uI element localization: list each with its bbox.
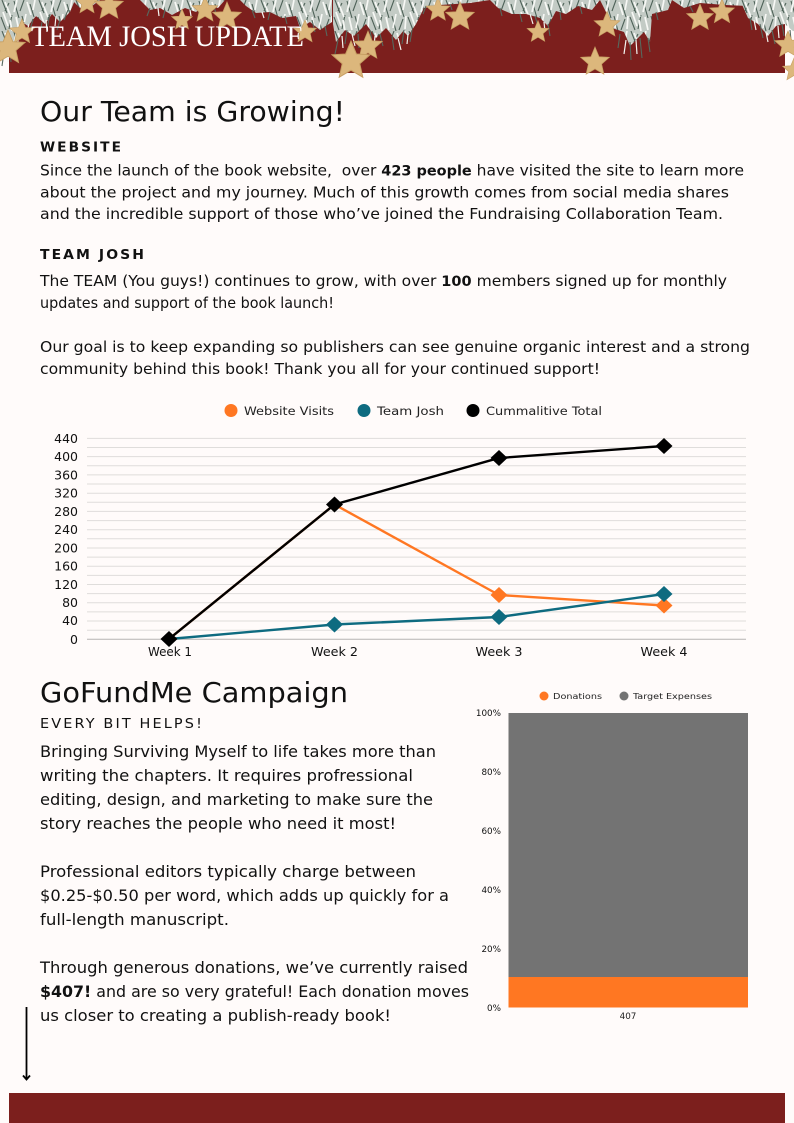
text block: website: Since the launch of the book website, over 423 people have visited the site to learn more — [40, 162, 744, 180]
x axis labels: Week 1 — [148, 644, 192, 659]
text block: team josh: updates and support of the book launch! — [40, 294, 334, 312]
bar label: 407 — [620, 1012, 636, 1022]
subheading: team josh: TEAM JOSH — [40, 247, 146, 263]
x axis labels: Week 2 — [311, 644, 358, 659]
text block: gofundme: us closer to creating a publish-ready book! — [40, 1006, 391, 1025]
bar chart axis labels: 80% — [481, 768, 501, 778]
y axis labels: 320 — [54, 486, 78, 500]
header band — [9, 0, 785, 73]
arrow — [23, 1007, 30, 1080]
legend: bar chart: Target Expenses — [632, 692, 712, 701]
legend: bar chart: Donations — [553, 692, 602, 701]
y axis labels: 160 — [54, 558, 78, 574]
text block: website: about the project and my journey. Much of this growth comes from social media shares — [40, 184, 729, 202]
fir needle fringes — [2, 4, 791, 66]
text block: gofundme: $407! and are so very grateful! Each donation moves — [40, 982, 469, 1001]
text block: team josh: Our goal is to keep expanding so publishers can see genuine organic interest and a strong — [40, 338, 750, 356]
series: cumulative total — [160, 438, 672, 647]
series: website visits — [169, 504, 672, 639]
y axis labels: 0 — [70, 632, 78, 647]
x axis labels — [148, 644, 688, 659]
y axis labels: 400 — [54, 449, 78, 464]
text block: gofundme: writing the chapters. It requires profressional — [40, 766, 413, 785]
series: team josh — [169, 586, 672, 639]
x axis labels: Week 4 — [640, 644, 688, 659]
text block: gofundme: Through generous donations, we’ve currently raised — [39, 958, 468, 977]
title: TEAM JOSH UPDATE — [31, 20, 304, 53]
text block: gofundme: Bringing Surviving Myself to life takes more than — [40, 742, 436, 761]
text block: gofundme: $0.25-$0.50 per word, which adds up quickly for a — [40, 886, 449, 905]
y axis labels: 80 — [62, 595, 78, 610]
heading: gofundme campaign: GoFundMe Campaign — [40, 676, 348, 709]
text block: gofundme: Professional editors typically charge between — [40, 862, 416, 881]
y axis labels: 280 — [54, 504, 78, 519]
text block: team josh: The TEAM (You guys!) continues to grow, with over 100 members signed up for monthly — [39, 272, 727, 290]
text block: website — [40, 162, 744, 223]
bar chart axis labels: 60% — [481, 827, 501, 837]
y axis labels: 240 — [54, 522, 78, 537]
y axis labels: 360 — [54, 468, 78, 482]
line chart — [54, 404, 746, 659]
legend: bar chart — [540, 692, 712, 701]
legend: line chart: Website Visits — [244, 404, 334, 418]
y axis labels: 120 — [54, 577, 78, 592]
y axis labels — [54, 431, 78, 647]
text block: gofundme: editing, design, and marketing to make sure the — [40, 790, 433, 809]
text block: team josh: community behind this book! Thank you all for your continued support! — [40, 360, 600, 378]
bar chart axis labels: 0% — [487, 1004, 501, 1014]
y axis labels: 40 — [62, 613, 78, 628]
bar chart axis labels — [476, 709, 501, 1014]
bar chart axis labels: 100% — [476, 709, 501, 719]
garland: frosted fir branches — [0, 0, 794, 66]
text block: website: and the incredible support of those who’ve joined the Fundraising Collaboration Team. — [40, 205, 723, 223]
footer band — [9, 1093, 785, 1123]
y axis labels: 200 — [54, 540, 78, 556]
garland: hanging stars — [0, 0, 794, 80]
bar: target expenses — [508, 713, 748, 977]
bar chart axis labels: 40% — [481, 886, 501, 896]
text block: gofundme: full-length manuscript. — [40, 910, 229, 929]
y axis labels: 440 — [54, 431, 78, 446]
text block: gofundme — [39, 742, 469, 1025]
legend: line chart: Team Josh — [376, 404, 444, 418]
subheading: every bit helps: EVERY BIT HELPS! — [40, 716, 204, 732]
text block: gofundme: story reaches the people who need it most! — [40, 814, 396, 833]
heading: our team is growing: Our Team is Growing! — [40, 95, 345, 128]
stacked bar chart — [476, 692, 748, 1022]
text block: team josh — [39, 272, 750, 378]
x axis labels: Week 3 — [476, 644, 522, 659]
legend: line chart: Cummalitive Total — [486, 404, 602, 418]
bar chart axis labels: 20% — [481, 945, 501, 955]
bar: donations — [508, 977, 748, 1008]
subheading: website: WEBSITE — [40, 140, 123, 156]
legend: line chart — [224, 404, 602, 418]
